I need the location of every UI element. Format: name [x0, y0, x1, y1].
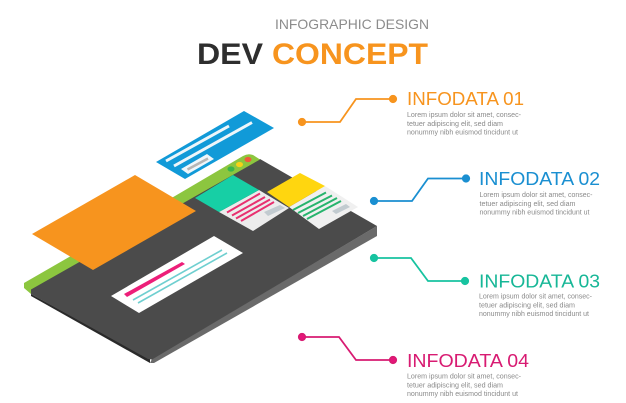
- block: infodata 04: [407, 351, 529, 398]
- block: infodata 01: nonummy nibh euismod tincidunt ut: [407, 130, 518, 136]
- block: infodata 04: tetuer adipiscing elit, sed diam: [407, 382, 503, 390]
- title: INFOGRAPHIC DESIGN: [275, 16, 429, 32]
- title: DEV: [197, 38, 263, 71]
- block: infodata 04: INFODATA 04: [407, 351, 529, 371]
- large white card: [111, 236, 243, 313]
- green browser bar: [24, 154, 260, 294]
- block: infodata 03: tetuer adipiscing elit, sed diam: [479, 302, 575, 310]
- teal panel card: [195, 175, 289, 231]
- connector: infodata 03: [371, 255, 468, 284]
- block: infodata 02: Lorem ipsum dolor sit amet, consec-: [480, 192, 593, 199]
- block: infodata 03: INFODATA 03: [479, 272, 600, 292]
- title: CONCEPT: [272, 38, 428, 71]
- yellow panel card: [267, 173, 358, 229]
- platform top: [31, 159, 377, 360]
- block: infodata 04: nonummy nibh euismod tincidunt ut: [407, 391, 518, 398]
- block: infodata 02: INFODATA 02: [479, 169, 600, 189]
- blue floating panel: [156, 111, 274, 179]
- platform right side: [150, 226, 377, 363]
- block: infodata 02: nonummy nibh euismod tincidunt ut: [480, 210, 590, 216]
- connector: infodata 04: [299, 334, 396, 363]
- orange floating panel: [32, 175, 196, 270]
- block: infodata 01: Lorem ipsum dolor sit amet, consec-: [407, 112, 522, 119]
- connector: infodata 02: [371, 175, 469, 204]
- block: infodata 01: tetuer adipiscing elit, sed diam: [407, 121, 503, 128]
- platform left side: [31, 294, 150, 363]
- block: infodata 02: [479, 169, 600, 216]
- block: infodata 03: Lorem ipsum dolor sit amet, consec-: [479, 294, 593, 300]
- block: infodata 03: nonummy nibh euismod tincidunt ut: [479, 311, 589, 318]
- block: infodata 04: Lorem ipsum dolor sit amet, consec-: [407, 374, 522, 380]
- connector: infodata 01: [299, 96, 396, 125]
- isometric browser platform: [24, 154, 377, 363]
- block: infodata 01: [407, 89, 524, 136]
- title: [197, 16, 429, 71]
- block: infodata 03: [479, 272, 600, 318]
- block: infodata 01: INFODATA 01: [407, 89, 524, 109]
- browser buttons: [228, 157, 252, 172]
- block: infodata 02: tetuer adipiscing elit, sed diam: [480, 201, 576, 208]
